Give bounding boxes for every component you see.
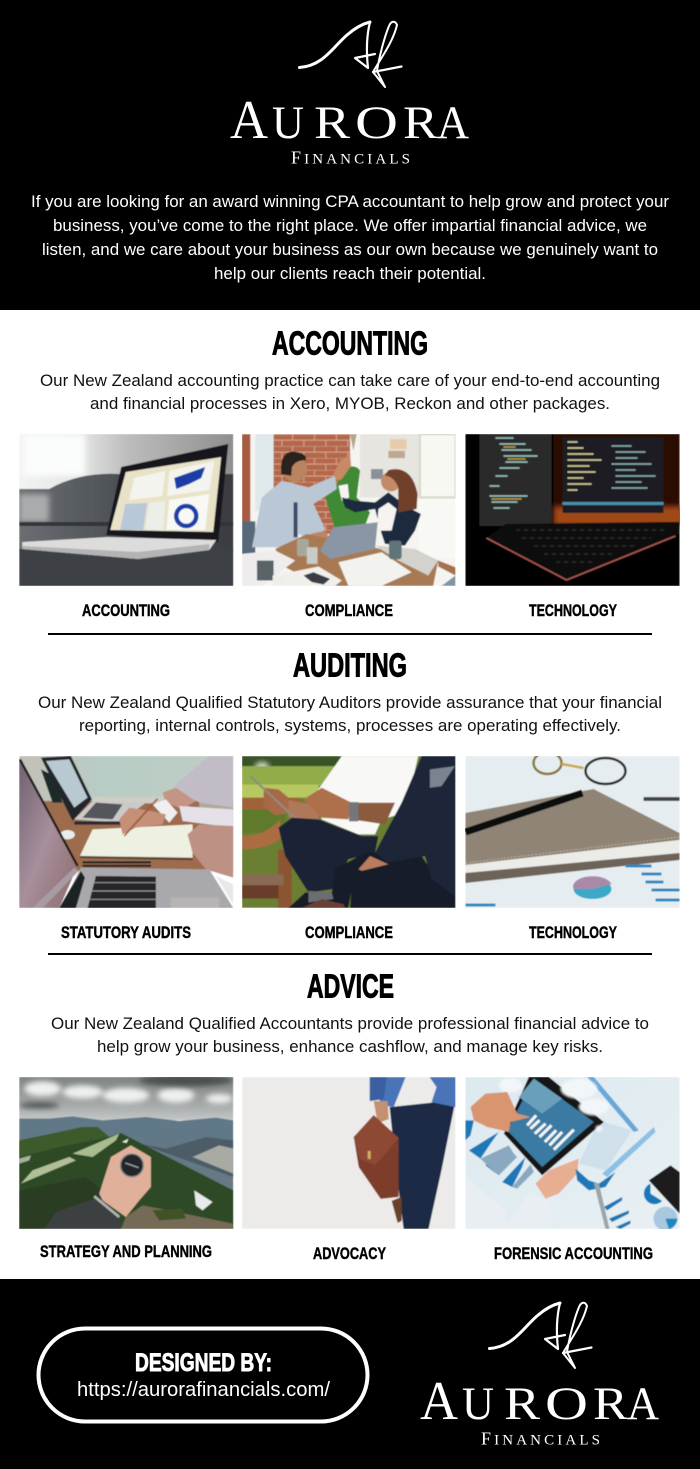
photo: colleagues high five bbox=[242, 434, 456, 586]
header band bbox=[0, 0, 700, 310]
text: accounting description bbox=[40, 371, 660, 413]
sub-wordmark footer: FINANCIALS bbox=[481, 1428, 600, 1448]
heading: Accounting: ACCOUNTING bbox=[272, 324, 428, 362]
wordmark bbox=[230, 89, 469, 150]
wordmark footer: R bbox=[593, 1378, 629, 1430]
photo: hands over laptops bbox=[19, 756, 234, 908]
photo: code on monitors bbox=[465, 434, 680, 586]
sub-wordmark: FINANCIALS bbox=[291, 148, 410, 168]
text: accounting description: Our New Zealand accounting practice can take care of your end-to-end accounting bbox=[40, 371, 660, 390]
intro paragraph: business, you’ve come to the right place. We offer impartial financial advice, we bbox=[53, 216, 647, 235]
wordmark footer: A bbox=[420, 1370, 458, 1431]
text: auditing description: Our New Zealand Qualified Statutory Auditors provide assurance that your financial bbox=[38, 693, 662, 712]
text: auditing description bbox=[38, 693, 662, 735]
wordmark: R bbox=[314, 97, 351, 149]
intro paragraph bbox=[31, 192, 669, 283]
text: advice description bbox=[51, 1014, 649, 1056]
caption: strategy and planning: STRATEGY AND PLANNING bbox=[40, 1242, 212, 1261]
caption: advocacy: ADVOCACY bbox=[313, 1244, 386, 1263]
caption: compliance: COMPLIANCE bbox=[305, 601, 393, 620]
footer band bbox=[0, 1279, 700, 1469]
caption: accounting: ACCOUNTING bbox=[82, 601, 170, 620]
wordmark: A bbox=[230, 89, 268, 150]
caption: compliance: COMPLIANCE bbox=[305, 923, 393, 942]
wordmark footer: U bbox=[462, 1378, 494, 1430]
wordmark: U bbox=[272, 97, 304, 149]
callout: designed by pill bbox=[38, 1328, 368, 1422]
logo: Aurora Financials footer bbox=[420, 1303, 659, 1448]
caption: technology: TECHNOLOGY bbox=[529, 923, 617, 942]
text: auditing description: reporting, internal controls, systems, processes are operating effectively. bbox=[79, 716, 621, 735]
heading: Auditing: AUDITING bbox=[293, 646, 407, 684]
caption: forensic accounting: FORENSIC ACCOUNTING bbox=[494, 1244, 653, 1263]
photo: person with briefcase bbox=[242, 1077, 456, 1229]
photo: pen on notebook bbox=[465, 756, 680, 908]
wordmark: A bbox=[437, 97, 469, 149]
heading: Advice: ADVICE bbox=[307, 968, 394, 1004]
text: accounting description: and financial processes in Xero, MYOB, Reckon and other packages. bbox=[90, 394, 610, 413]
photo: compass on mountain bbox=[19, 1077, 234, 1229]
wordmark footer: R bbox=[504, 1378, 541, 1430]
wordmark footer: A bbox=[627, 1378, 659, 1430]
text: advice description: Our New Zealand Qualified Accountants provide professional financial advice to bbox=[51, 1014, 649, 1033]
caption: technology: TECHNOLOGY bbox=[529, 601, 617, 620]
photo: laptop on sofa bbox=[19, 434, 234, 586]
photo: business people with tablet bbox=[242, 756, 456, 908]
link: website: https://aurorafinancials.com/ bbox=[77, 1379, 330, 1401]
wordmark footer bbox=[420, 1370, 659, 1431]
wordmark: O bbox=[355, 97, 398, 149]
wordmark footer: O bbox=[545, 1378, 588, 1430]
label: designed by: DESIGNED BY: bbox=[135, 1349, 272, 1377]
icon: Af monogram bbox=[300, 22, 402, 87]
logo: Aurora Financials bbox=[230, 22, 469, 168]
text: advice description: help grow your business, enhance cashflow, and manage key risks. bbox=[97, 1037, 603, 1056]
photo: tablet and financial charts bbox=[465, 1077, 680, 1229]
intro paragraph: help our clients reach their potential. bbox=[214, 264, 486, 283]
icon: Af monogram footer bbox=[490, 1303, 592, 1368]
intro paragraph: If you are looking for an award winning CPA accountant to help grow and protect your bbox=[31, 192, 669, 211]
caption: statutory audits: STATUTORY AUDITS bbox=[61, 923, 191, 942]
wordmark: R bbox=[403, 97, 439, 149]
intro paragraph: listen, and we care about your business as our own because we genuinely want to bbox=[42, 240, 658, 259]
